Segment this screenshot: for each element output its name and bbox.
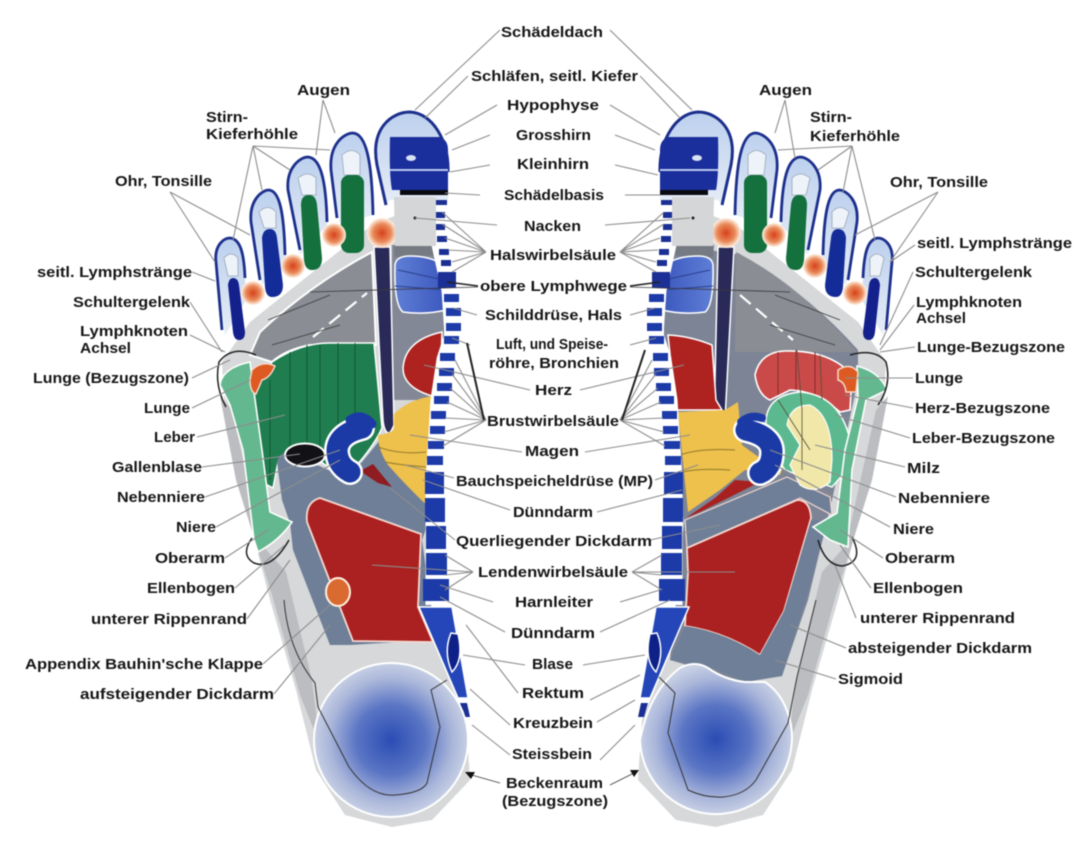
right foot — [638, 112, 892, 827]
left labels: Lunge — [144, 400, 190, 417]
left joint arcs — [218, 351, 289, 564]
left shoulder band — [250, 252, 376, 362]
centre labels: obere Lymphwege — [480, 278, 627, 295]
centre labels: Schädeldach — [501, 24, 603, 41]
right labels: Oberarm — [885, 550, 955, 567]
centre labels — [456, 24, 653, 810]
right labels: Augen — [759, 82, 812, 99]
left grey intestine — [277, 440, 436, 645]
left labels: Gallenblase — [112, 459, 202, 476]
right labels — [759, 82, 1072, 688]
centre labels: Dünndarm — [511, 625, 595, 642]
right labels: Schultergelenk — [915, 264, 1033, 281]
right thyroid and column — [662, 245, 734, 433]
left labels: seitl. Lymphstränge — [37, 264, 192, 281]
right heel — [640, 664, 792, 814]
right lung stripes — [778, 350, 815, 395]
left thyroid and column — [374, 245, 446, 433]
right dark-blue spine — [638, 197, 689, 717]
left heart — [403, 332, 442, 398]
centre labels: Magen — [525, 443, 579, 460]
left orange lung — [250, 364, 275, 394]
centre labels: Kreuzbein — [513, 715, 593, 732]
left labels: Lymphknoten — [80, 323, 188, 340]
right labels: Ohr, Tonsille — [890, 174, 988, 191]
right labels: unterer Rippenrand — [860, 610, 1015, 627]
right labels: Achsel — [916, 310, 966, 327]
right labels: Leber-Bezugszone — [912, 430, 1055, 447]
left heel — [314, 663, 468, 817]
right joint arcs — [818, 353, 888, 566]
right labels: Lunge-Bezugszone — [917, 339, 1065, 356]
left labels: Schultergelenk — [73, 294, 191, 311]
centre labels: (Bezugszone) — [502, 793, 608, 810]
right toes — [660, 112, 892, 340]
left mid grey field — [392, 245, 444, 400]
right labels: Nebenniere — [898, 490, 990, 507]
right pancreas lines — [680, 450, 735, 472]
right kidney — [746, 430, 772, 473]
left foot base — [220, 198, 470, 827]
left foot — [216, 112, 470, 827]
left dark-blue spine — [419, 197, 470, 717]
left gallbladder — [285, 444, 325, 466]
centre labels: Steissbein — [512, 746, 592, 763]
centre labels: Dünndarm — [513, 504, 593, 521]
right colon outline — [659, 600, 816, 797]
centre labels: Bauchspeicheldrüse (MP) — [456, 473, 653, 490]
right foot base — [638, 198, 888, 827]
centre labels: röhre, Bronchien — [489, 355, 619, 372]
left labels — [25, 82, 350, 703]
left small red patch — [360, 464, 392, 487]
right arm — [813, 366, 887, 547]
centre labels: Grosshirn — [516, 127, 591, 144]
pelvic arrows — [468, 772, 636, 785]
centre labels: Halswirbelsäule — [490, 247, 616, 264]
left labels: Achsel — [80, 340, 131, 357]
right shoulder dashes — [740, 295, 793, 340]
centre labels: Lendenwirbelsäule — [478, 564, 628, 581]
centre labels: Kleinhirn — [517, 156, 589, 173]
left stomach — [378, 396, 432, 510]
centre labels: Brustwirbelsäule — [487, 413, 619, 430]
right labels: Ellenbogen — [873, 580, 963, 597]
right orange lung — [838, 366, 858, 392]
right adrenal — [741, 417, 762, 422]
right labels: Kieferhöhle — [810, 128, 900, 145]
centre labels: Schilddrüse, Hals — [485, 307, 622, 324]
right grey band — [685, 477, 832, 548]
right lower grey colon — [670, 520, 828, 682]
centre labels: Schläfen, seitl. Kiefer — [471, 68, 638, 85]
left toes — [216, 112, 448, 340]
centre labels: Nacken — [524, 218, 581, 235]
left labels: Stirn- — [206, 109, 248, 126]
left orange appendix — [326, 578, 350, 606]
right grey zones — [664, 245, 858, 682]
left shoulder dashes — [313, 293, 367, 337]
left pancreas lines — [378, 447, 426, 467]
right lung — [755, 351, 852, 412]
right labels: Lymphknoten — [916, 294, 1022, 311]
left labels: Ellenbogen — [147, 580, 235, 597]
centre labels: Herz — [535, 382, 572, 399]
right spleen — [787, 405, 832, 489]
right labels: Milz — [907, 460, 940, 477]
left labels: Augen — [297, 82, 350, 99]
centre labels: Harnleiter — [515, 594, 593, 611]
centre labels: Hypophyse — [507, 97, 599, 114]
right labels: Sigmoid — [838, 671, 903, 688]
centre labels: Luft, und Speise- — [496, 336, 608, 353]
left adrenal — [350, 417, 372, 424]
left labels: Leber — [154, 429, 195, 446]
left labels: Niere — [176, 519, 216, 536]
left liver stripes — [270, 343, 355, 480]
right organ lines — [778, 350, 822, 470]
left labels: aufsteigender Dickdarm — [80, 686, 274, 703]
left kidney — [337, 428, 362, 472]
right labels: Niere — [893, 521, 934, 538]
right heart — [668, 335, 722, 410]
left red intestine — [307, 498, 433, 642]
left labels: Appendix Bauhin'sche Klappe — [25, 656, 263, 673]
left colon outline — [284, 600, 447, 795]
left labels: Ohr, Tonsille — [115, 173, 212, 190]
right labels: Herz-Bezugszone — [915, 400, 1050, 417]
centre labels: Schädelbasis — [504, 187, 604, 204]
right stomach — [678, 402, 787, 512]
right lower dark red patch — [686, 480, 760, 518]
centre labels: Querliegender Dickdarm — [456, 533, 652, 550]
left labels: Nebenniere — [117, 489, 205, 506]
left labels: Kieferhöhle — [206, 126, 298, 143]
right red intestine — [685, 500, 811, 655]
left labels: unterer Rippenrand — [91, 611, 247, 628]
centre labels: Rektum — [522, 685, 584, 702]
right labels: Lunge — [915, 370, 963, 387]
left labels: Oberarm — [155, 550, 225, 567]
left liver — [250, 343, 382, 488]
left arm — [220, 362, 292, 552]
right shoulder band — [735, 252, 857, 352]
leader lines — [170, 30, 938, 785]
centre labels: Blase — [532, 656, 573, 673]
right labels: seitl. Lymphstränge — [917, 235, 1072, 252]
right labels: Stirn- — [810, 109, 852, 126]
right liver zone — [766, 392, 850, 487]
centre labels: Beckenraum — [506, 775, 603, 792]
left labels: Lunge (Bezugszone) — [33, 370, 189, 387]
right labels: absteigender Dickdarm — [848, 640, 1032, 657]
